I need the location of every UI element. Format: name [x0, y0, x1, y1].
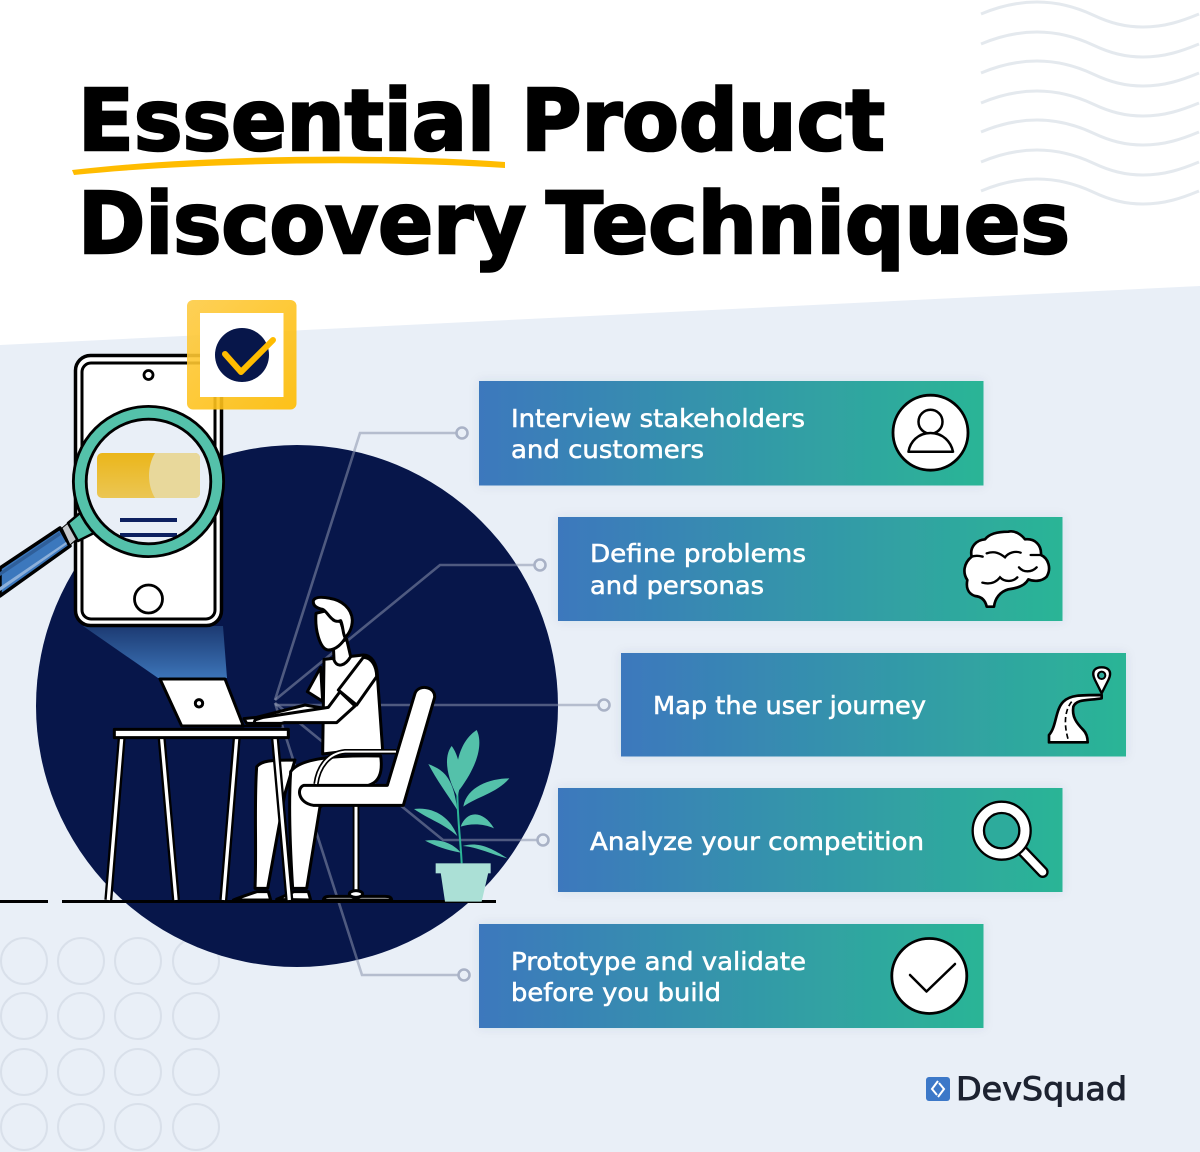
decorative waves [981, 2, 1199, 204]
card 3: map journey: Map the user journey [653, 691, 926, 720]
background panel [0, 286, 1200, 1152]
icon: person [893, 395, 968, 470]
handle [0, 513, 94, 596]
card 1: interview: and customers [511, 435, 704, 464]
card 3: map journey [621, 653, 1126, 756]
magnifying glass [0, 413, 217, 596]
lens content [86, 418, 212, 544]
plant [414, 730, 509, 902]
icon: check circle [892, 938, 967, 1014]
desk [108, 729, 289, 900]
connector lines [275, 428, 610, 980]
ground line [0, 900, 496, 903]
laptop [160, 679, 282, 726]
card 5: prototype [479, 924, 984, 1028]
card 2: define problems: Define problems [590, 539, 806, 568]
chair seat [300, 687, 435, 805]
torso and head [313, 597, 383, 754]
checkmark badge [187, 300, 296, 410]
card 1: interview [479, 381, 984, 486]
phone [76, 356, 222, 626]
card 4: competition [558, 788, 1062, 892]
DevSquad logo: DevSquad [956, 1070, 1127, 1108]
icon: road with pin [1049, 667, 1110, 742]
title: Techniques [546, 175, 1070, 274]
title: Essential [78, 72, 495, 171]
card 2: define problems: and personas [590, 571, 764, 600]
title: Discovery [78, 175, 526, 274]
chair base [323, 805, 392, 900]
screen light beam [83, 626, 227, 678]
card 5: prototype: Prototype and validate [511, 947, 806, 976]
icon: magnifier [973, 802, 1043, 872]
card 5: prototype: before you build [511, 978, 721, 1007]
dot pattern [1, 938, 219, 1150]
title underline [72, 157, 505, 175]
person at desk illustration [108, 597, 509, 902]
back arm [244, 667, 324, 723]
legs [233, 756, 381, 900]
card 4: competition: Analyze your competition [590, 827, 924, 856]
navy circle [36, 445, 558, 967]
title [78, 72, 1070, 274]
card 1: interview: Interview stakeholders [511, 404, 805, 433]
front arm [254, 657, 377, 723]
icon: brain [964, 531, 1049, 607]
title: Product [521, 72, 885, 171]
card 2: define problems [558, 517, 1062, 621]
